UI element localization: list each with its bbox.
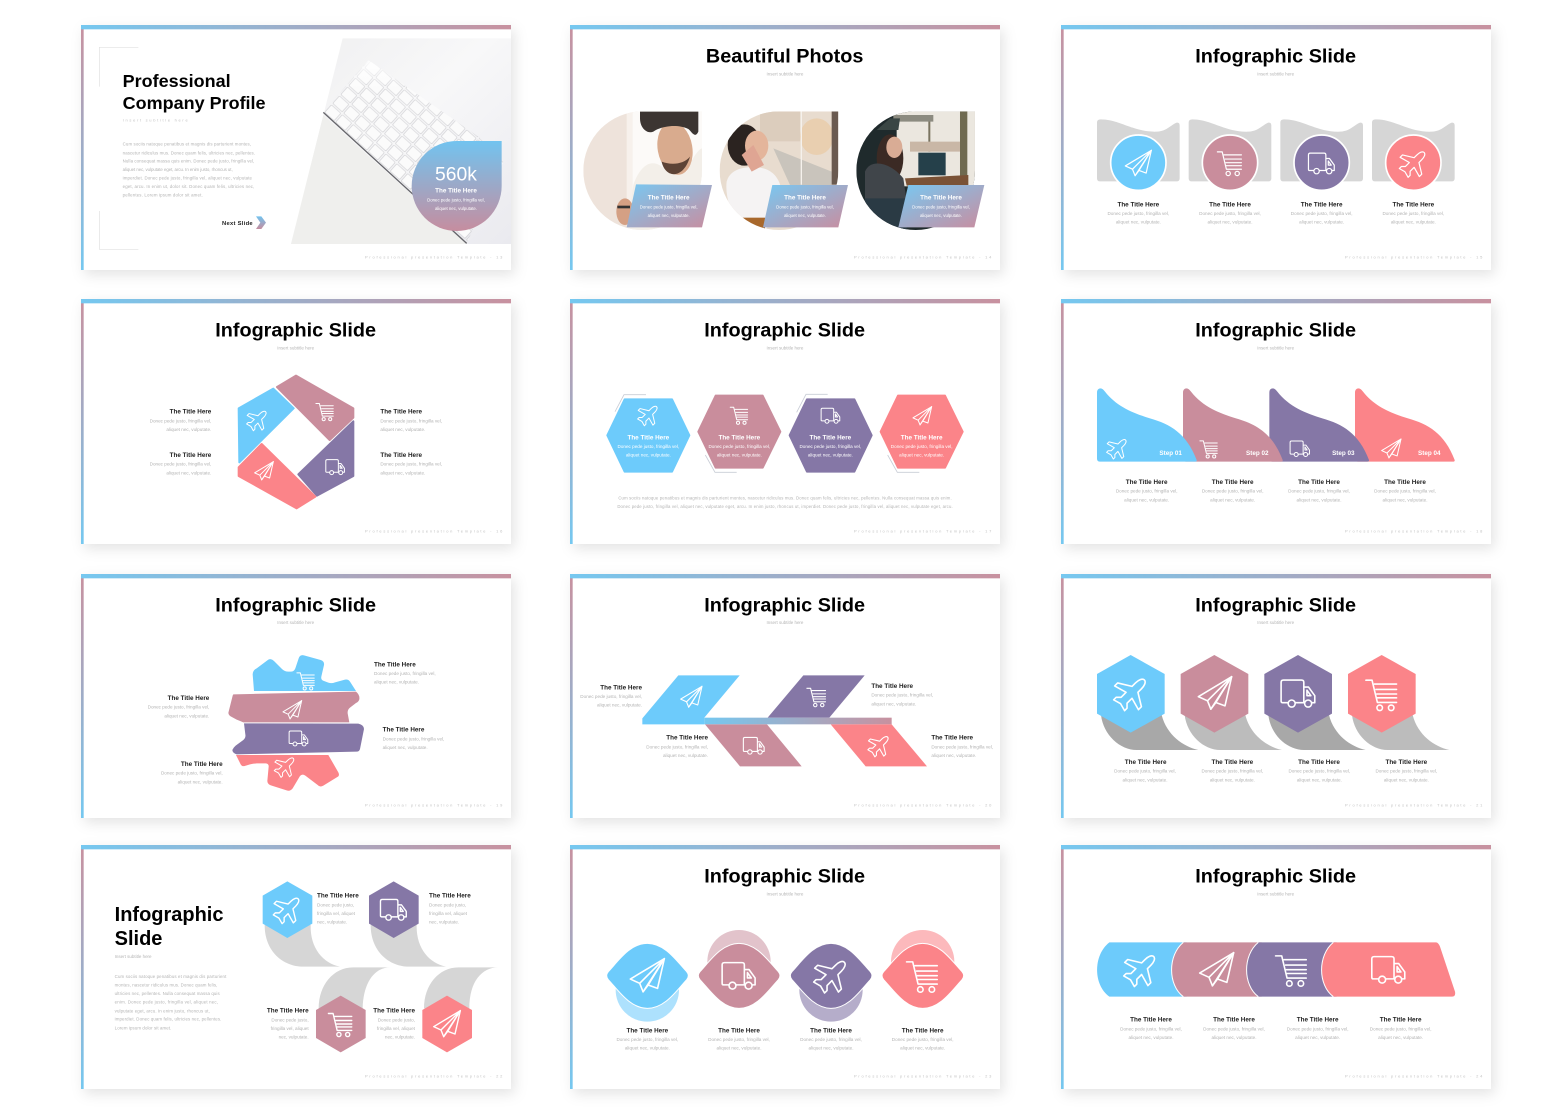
slide 5: four hexagons with paragraph: [570, 299, 1000, 544]
step 02 text: Donec pede justo, fringilla vel,: [1202, 489, 1264, 494]
step 04 text: aliquet nec, vulputate.: [1382, 497, 1427, 502]
card 2: [763, 185, 848, 227]
bottom paragraph: Cum sociis natoque penatibus et magnis dis parturient montes, nascetur ridiculus mus. Donec quam felis, ultricies nec, pellentes. Nulla consequat massa quis enim.: [618, 495, 952, 500]
parallelogram: purple cart: [768, 675, 865, 718]
label: bottom right: Donec pede justo, fringilla vel,: [380, 462, 442, 467]
hexagon 1: blue: aliquet nec, vulputate.: [626, 453, 671, 458]
subtitle: Insert subtitle here: [115, 954, 152, 959]
segment 3: purple cart: [1247, 942, 1337, 997]
card 2: The Title Here: [784, 194, 826, 201]
item 3: purple hexagon: aliquet nec, vulputate.: [1297, 777, 1342, 782]
body paragraph: imperdiet. Donec quam felis, ultricies nec, pellentes.: [115, 1017, 221, 1022]
card 1: Donec pede justo, fringilla vel,: [640, 204, 698, 209]
card 3: Donec pede justo, fringilla vel,: [912, 204, 970, 209]
title: Beautiful Photos: [706, 46, 863, 68]
callout: 560k bubble: 560k: [435, 165, 477, 186]
slide 7: gear: [81, 574, 511, 818]
step 01 sail: Step 01: [1159, 450, 1182, 457]
step 04 text: The Title Here: [1384, 479, 1426, 486]
heading: Slide: [115, 928, 162, 950]
item 2: cart: [1189, 119, 1271, 225]
item 3: purple hexagon: [1264, 655, 1366, 782]
segment: blue airplane: [239, 389, 294, 462]
step 04 sail: Step 04: [1418, 450, 1441, 457]
step 03 text: Donec pede justo, fringilla vel,: [1288, 489, 1350, 494]
body paragraph: enim. Donec pede justo, fringilla vel, aliquet nec,: [115, 1000, 218, 1005]
label 2: [1203, 1017, 1265, 1040]
item 1: blue hexagon: Donec pede justo, fringilla vel,: [1114, 769, 1176, 774]
label: blue: aliquet nec, vulputate.: [597, 703, 642, 708]
step 01 text: [1116, 479, 1178, 502]
label 1: Donec pede justo, fringilla vel,: [1120, 1026, 1182, 1031]
hexagon 4: coral: The Title Here: [901, 434, 943, 441]
title: Infographic Slide: [1195, 866, 1356, 888]
subtitle: Insert subtitle here: [767, 71, 804, 76]
label: bottom right: The Title Here: [380, 452, 423, 459]
card 2: aliquet nec, vulputate.: [784, 213, 826, 218]
label: bottom right: [373, 1008, 416, 1040]
label: purple: aliquet nec, vulputate.: [871, 701, 916, 706]
lens 1: blue plane: The Title Here: [626, 1027, 669, 1034]
segment 4: coral truck: [1322, 942, 1455, 997]
hexagon 2: rose: aliquet nec, vulputate.: [717, 453, 762, 458]
item 2: rose hexagon: The Title Here: [1211, 759, 1254, 766]
subtitle: Insert subtitle here: [1257, 345, 1295, 350]
item 2: cart: Donec pede justo, fringilla vel,: [1199, 211, 1261, 216]
label 4: [1370, 1017, 1432, 1040]
callout: 560k bubble: Donec pede justo, fringilla vel,: [427, 198, 485, 203]
label 1: The Title Here: [1130, 1017, 1172, 1024]
label: top left: fringilla vel, aliquet: [317, 911, 356, 916]
parallelogram: blue plane: [642, 675, 740, 724]
label: rose: The Title Here: [666, 735, 708, 742]
body paragraph: vulputate eget, arcu. In enim justo, rhoncus ut,: [115, 1008, 210, 1013]
label: bottom right: Donec pede justo,: [378, 1017, 415, 1022]
label: rose: [646, 735, 708, 758]
item 1: blue hexagon: aliquet nec, vulputate.: [1122, 777, 1167, 782]
hexagon: coral plane: [422, 996, 472, 1052]
heading: [123, 71, 266, 113]
label 4: aliquet nec, vulputate.: [1378, 1035, 1423, 1040]
step 01 text: The Title Here: [1126, 479, 1168, 486]
slide 12: segmented bar: [1061, 845, 1491, 1089]
heading: Professional: [123, 71, 231, 91]
label 2: Donec pede justo, fringilla vel,: [1203, 1026, 1265, 1031]
label 3: Donec pede justo, fringilla vel,: [1287, 1026, 1349, 1031]
slide 1: professional company profile: [81, 25, 511, 270]
label: lower right: aliquet nec, vulputate.: [383, 745, 428, 750]
item 3: truck: [1280, 119, 1363, 225]
item 4: coral hexagon: aliquet nec, vulputate.: [1384, 777, 1429, 782]
lens 4: coral cart: aliquet nec, vulputate.: [900, 1046, 945, 1051]
step 02 sail: Step 02: [1246, 450, 1269, 457]
label: top right: Donec pede justo, fringilla vel,: [374, 671, 436, 676]
label: bottom left: The Title Here: [267, 1008, 309, 1015]
lens 3: purple airplane: [790, 943, 872, 1051]
lens 2: rose truck: The Title Here: [718, 1027, 760, 1034]
label: top left: The Title Here: [170, 409, 212, 416]
body paragraph: nascetur ridiculus mus. Donec quam felis, ultricies nec, pellentes.: [123, 150, 255, 155]
slide 6: step sails: [1061, 299, 1491, 544]
label: coral: Donec pede justo, fringilla vel,: [931, 744, 993, 749]
label: top left: The Title Here: [317, 893, 359, 900]
label: bottom right: The Title Here: [373, 1008, 415, 1015]
next slide link: Next Slide: [222, 221, 253, 227]
item 2: rose hexagon: aliquet nec, vulputate.: [1210, 777, 1255, 782]
step 01 text: Donec pede justo, fringilla vel,: [1116, 489, 1178, 494]
step 04 text: [1374, 479, 1436, 502]
photo: woman at laptop: [856, 111, 975, 230]
lens 1: blue plane: Donec pede justo, fringilla vel,: [616, 1037, 678, 1042]
gear diagram: [228, 655, 364, 791]
card 1: [627, 184, 712, 227]
card 3: The Title Here: [920, 194, 962, 201]
gear slice: blue cart: [253, 655, 356, 691]
card 2: Donec pede justo, fringilla vel,: [776, 204, 834, 209]
label: top right: [429, 893, 471, 924]
label: bottom left: fringilla vel, aliquet: [271, 1026, 309, 1031]
slide 9: hexagons with tails: [1061, 574, 1491, 818]
label: lower right: [383, 727, 444, 750]
footer: Professional presentation Template - 19: [365, 803, 503, 808]
slide 10: left heading with connected hexagons: [81, 845, 511, 1089]
body paragraph: Lorem ipsum dolor sit amet.: [115, 1025, 171, 1030]
lens 4: coral cart: [882, 930, 964, 1051]
footer: Professional presentation Template - 14: [854, 255, 992, 260]
footer: Professional presentation Template - 21: [1345, 803, 1483, 808]
body paragraph: Cum sociis natoque penatibus et magnis dis parturient montes,: [123, 142, 251, 147]
label: top right: The Title Here: [374, 661, 416, 668]
hexagon: blue airplane: [263, 881, 312, 938]
label 2: The Title Here: [1213, 1017, 1255, 1024]
segment: coral plane: [239, 444, 315, 508]
hexagon 1: blue: Donec pede justo, fringilla vel,: [617, 444, 679, 449]
label: bottom right: aliquet nec, vulputate.: [380, 470, 425, 475]
slide 2: beautiful photos: [570, 25, 1000, 270]
footer: Professional presentation Template - 22: [365, 1074, 503, 1079]
label: top left: Donec pede justo,: [317, 903, 354, 908]
item 3: truck: Donec pede justo, fringilla vel,: [1291, 211, 1353, 216]
subtitle: Insert subtitle here: [1257, 620, 1295, 625]
hexagon: rose cart: [316, 996, 366, 1052]
label 1: [1120, 1017, 1182, 1040]
card 1: The Title Here: [648, 194, 690, 201]
keyboard photo: [291, 38, 511, 244]
slide 4: hexagon cycle: [81, 299, 511, 544]
label: top right: The Title Here: [429, 893, 471, 900]
label 4: The Title Here: [1380, 1017, 1422, 1024]
hexagon 2: rose: Donec pede justo, fringilla vel,: [708, 444, 770, 449]
title: Infographic Slide: [215, 594, 376, 616]
hexagon 3: purple: aliquet nec, vulputate.: [808, 453, 853, 458]
footer: Professional presentation Template - 16: [365, 529, 503, 534]
hexagon: purple truck: [369, 881, 419, 938]
title: Infographic Slide: [215, 320, 376, 342]
footer: Professional presentation Template - 24: [1345, 1074, 1483, 1079]
label: bottom right: fringilla vel, aliquet: [377, 1026, 416, 1031]
gear slice: coral airplane: [236, 751, 339, 791]
label: top right: Donec pede justo, fringilla vel,: [380, 418, 442, 423]
item 3: purple hexagon: The Title Here: [1298, 759, 1340, 766]
label: lower left: The Title Here: [181, 761, 223, 768]
item 1: plane: aliquet nec, vulputate.: [1116, 220, 1161, 225]
label: upper left: The Title Here: [168, 695, 210, 702]
step 02 sail: [1183, 388, 1283, 462]
item 1: blue hexagon: The Title Here: [1125, 759, 1167, 766]
label: upper left: aliquet nec, vulputate.: [164, 713, 209, 718]
label: coral: The Title Here: [931, 735, 974, 742]
segment 1: blue airplane: [1097, 942, 1187, 997]
label: top right: [380, 409, 442, 432]
body paragraph: ultricies nec, pellentes. Nulla consequat massa quis: [115, 991, 220, 996]
label: blue: [580, 684, 642, 708]
step 02 text: The Title Here: [1212, 479, 1254, 486]
step 01 text: aliquet nec, vulputate.: [1124, 497, 1169, 502]
step 02 text: aliquet nec, vulputate.: [1210, 497, 1255, 502]
item 4: coral hexagon: Donec pede justo, fringilla vel,: [1375, 769, 1437, 774]
item 1: plane: [1097, 119, 1180, 225]
body paragraph: Nulla consequat massa quis enim. Donec pede justo, fringilla vel,: [123, 159, 254, 164]
label: bottom left: Donec pede justo,: [271, 1017, 309, 1022]
segment: rose cart: [277, 376, 353, 440]
label: purple: The Title Here: [871, 683, 914, 690]
title: Infographic Slide: [704, 320, 865, 342]
item 1: plane: The Title Here: [1117, 201, 1160, 208]
subtitle: Insert subtitle here: [767, 620, 804, 625]
label: top right: fringilla vel, aliquet: [429, 911, 468, 916]
label: blue: The Title Here: [600, 684, 642, 691]
label: top left: [150, 409, 212, 432]
label: top right: aliquet nec, vulputate.: [374, 680, 419, 685]
label 1: aliquet nec, vulputate.: [1128, 1035, 1173, 1040]
hexagon 4: coral: Donec pede justo, fringilla vel,: [891, 444, 953, 449]
label: rose: Donec pede justo, fringilla vel,: [646, 744, 708, 749]
item 2: rose hexagon: Donec pede justo, fringilla vel,: [1201, 769, 1263, 774]
gear slice: purple truck: [232, 723, 364, 754]
label: purple: [871, 683, 933, 706]
footer: Professional presentation Template - 17: [854, 529, 992, 534]
item 3: truck: The Title Here: [1301, 201, 1343, 208]
hexagon 2: rose: [698, 396, 780, 472]
body paragraph: [123, 142, 255, 198]
callout: 560k bubble: aliquet nec, vulputate.: [435, 206, 477, 211]
label: lower left: aliquet nec, vulputate.: [178, 779, 223, 784]
lens 3: purple airplane: The Title Here: [810, 1027, 852, 1034]
connector tails: [265, 925, 498, 1008]
decorative corner brackets: [99, 47, 138, 249]
body paragraph: Cum sociis natoque penatibus et magnis dis parturient: [115, 974, 227, 979]
label: bottom left: [267, 1008, 309, 1040]
title: Infographic Slide: [1195, 46, 1356, 68]
label 3: The Title Here: [1297, 1017, 1339, 1024]
item 4: coral hexagon: [1348, 655, 1449, 782]
item 2: rose hexagon: [1181, 655, 1282, 782]
item 2: cart: aliquet nec, vulputate.: [1207, 220, 1252, 225]
label 3: aliquet nec, vulputate.: [1295, 1035, 1340, 1040]
body paragraph: imperdiet. Donec pede justo, fringilla vel, aliquet nec, vulputate: [123, 176, 253, 181]
slide 3: circles on grey flags: [1061, 25, 1491, 270]
footer: Professional presentation Template - 20: [854, 803, 992, 808]
photo: woman on phone: [720, 112, 838, 230]
next slide link: [222, 216, 266, 229]
subtitle: Insert subtitle here: [277, 345, 315, 350]
label: lower right: The Title Here: [383, 727, 425, 734]
card 1: aliquet nec, vulputate.: [648, 213, 690, 218]
bottom paragraph: [617, 495, 953, 509]
label: bottom right: [380, 452, 442, 475]
hexagon 1: blue: The Title Here: [627, 434, 670, 441]
step 03 sail: Step 03: [1332, 450, 1355, 457]
item 3: purple hexagon: Donec pede justo, fringilla vel,: [1288, 769, 1350, 774]
subtitle: Insert subtitle here: [277, 620, 315, 625]
item 4: airplane: Donec pede justo, fringilla vel,: [1382, 211, 1444, 216]
footer: Professional presentation Template - 13: [365, 255, 503, 260]
segment 2: rose plane: [1172, 942, 1262, 997]
item 1: plane: Donec pede justo, fringilla vel,: [1107, 211, 1169, 216]
label 2: aliquet nec, vulputate.: [1211, 1035, 1256, 1040]
label: rose: aliquet nec, vulputate.: [663, 753, 708, 758]
lens 1: blue plane: aliquet nec, vulputate.: [625, 1046, 670, 1051]
callout: 560k bubble: [412, 141, 502, 231]
label: lower right: Donec pede justo, fringilla vel,: [383, 736, 444, 741]
label: top left: Donec pede justo, fringilla vel,: [150, 418, 211, 423]
label 3: [1287, 1017, 1349, 1040]
callout: 560k bubble: The Title Here: [435, 188, 477, 195]
item 4: airplane: aliquet nec, vulputate.: [1391, 220, 1436, 225]
label: upper left: Donec pede justo, fringilla vel,: [148, 705, 209, 710]
item 4: airplane: [1372, 119, 1455, 225]
label 4: Donec pede justo, fringilla vel,: [1370, 1026, 1432, 1031]
step 03 sail: [1269, 388, 1369, 462]
heading: [115, 904, 223, 950]
subtitle: Insert subtitle here: [1257, 71, 1295, 76]
parallelogram: coral airplane: [831, 724, 927, 766]
slide 11: lens shapes: [570, 845, 1000, 1089]
label: lower left: Donec pede justo, fringilla vel,: [161, 771, 223, 776]
card 3: [898, 185, 984, 227]
hexagon 2: rose: The Title Here: [718, 434, 761, 441]
step 01 sail: [1097, 388, 1197, 463]
label: bottom left: aliquet nec, vulputate.: [166, 470, 211, 475]
lens 4: coral cart: Donec pede justo, fringilla vel,: [892, 1037, 954, 1042]
hexagon 4: coral: aliquet nec, vulputate.: [899, 453, 944, 458]
step 02 text: [1202, 479, 1264, 502]
body paragraph: aliquet nec, vulputate eget, arcu. In enim justo, rhoncus ut,: [123, 167, 233, 172]
label: lower left: [161, 761, 223, 784]
footer: Professional presentation Template - 23: [854, 1074, 992, 1079]
step 03 text: The Title Here: [1298, 479, 1340, 486]
body paragraph: pellentes. Lorem ipsum dolor sit amet.: [123, 193, 203, 198]
label: bottom left: nec, vulputate.: [279, 1035, 309, 1040]
card 3: aliquet nec, vulputate.: [920, 213, 962, 218]
hexagon 4: coral: [881, 396, 963, 472]
title: Infographic Slide: [704, 594, 865, 616]
hexagon 3: purple: The Title Here: [809, 434, 852, 441]
title: Infographic Slide: [1195, 594, 1356, 616]
label: top right: Donec pede justo,: [429, 903, 466, 908]
slide 8: parallelogram timeline: [570, 574, 1000, 818]
subtitle: Insert subtitle here: [767, 891, 804, 896]
step 04 text: Donec pede justo, fringilla vel,: [1374, 489, 1436, 494]
item 3: truck: aliquet nec, vulputate.: [1299, 220, 1344, 225]
lens 3: purple airplane: aliquet nec, vulputate.: [808, 1046, 853, 1051]
label: blue: Donec pede justo, fringilla vel,: [580, 694, 642, 699]
bottom paragraph: Donec pede justo, fringilla vel, aliquet nec, vulputate eget, arcu. In enim justo, rhoncus ut, imperdiet. Donec pede justo, fringilla vel, aliquet nec, vulputate eget, arcu.: [617, 504, 953, 509]
label: purple: Donec pede justo, fringilla vel,: [871, 693, 933, 698]
gear slice: rose plane: [228, 692, 359, 722]
label: top right: nec, vulputate.: [429, 919, 459, 924]
segment: purple truck: [298, 421, 353, 496]
label: top right: aliquet nec, vulputate.: [380, 427, 425, 432]
label: coral: aliquet nec, vulputate.: [931, 753, 976, 758]
item 1: blue hexagon: [1097, 655, 1198, 782]
lens 2: rose truck: aliquet nec, vulputate.: [716, 1046, 761, 1051]
label: bottom right: nec, vulputate.: [385, 1035, 415, 1040]
footer: Professional presentation Template - 15: [1345, 255, 1483, 260]
subtitle: Insert subtitle here: [767, 345, 804, 350]
label: top left: [317, 893, 359, 924]
body paragraph: [115, 974, 227, 1030]
parallelogram: rose truck: [705, 724, 802, 766]
label: coral: [931, 735, 993, 758]
label: bottom left: The Title Here: [170, 452, 212, 459]
lens 1: blue plane: [607, 943, 688, 1051]
heading: Company Profile: [123, 93, 266, 113]
step 03 text: aliquet nec, vulputate.: [1296, 497, 1341, 502]
lens 3: purple airplane: Donec pede justo, fringilla vel,: [800, 1037, 862, 1042]
label: top left: aliquet nec, vulputate.: [166, 427, 211, 432]
photo: man with phone: [584, 112, 702, 230]
label: bottom left: [150, 452, 212, 475]
hexagon 3: purple: Donec pede justo, fringilla vel,: [799, 444, 861, 449]
lens 4: coral cart: The Title Here: [902, 1027, 944, 1034]
label: bottom left: Donec pede justo, fringilla vel,: [150, 462, 211, 467]
lens 2: rose truck: Donec pede justo, fringilla vel,: [708, 1037, 770, 1042]
subtitle: Insert subtitle here: [1257, 891, 1295, 896]
hexagon diagram: [239, 376, 353, 508]
item 4: airplane: The Title Here: [1392, 201, 1435, 208]
lens 2: rose truck: [698, 930, 780, 1051]
label: top left: nec, vulputate.: [317, 919, 347, 924]
subtitle: Insert subtitle here: [123, 117, 188, 122]
footer: Professional presentation Template - 18: [1345, 529, 1483, 534]
body paragraph: montes, nascetur ridiculus mus. Donec quam felis,: [115, 983, 217, 988]
body paragraph: eget, arcu. In enim ut, dolor sit. Donec quam felis, ultricies nec,: [123, 184, 254, 189]
heading: Infographic: [115, 904, 223, 926]
item 4: coral hexagon: The Title Here: [1385, 759, 1428, 766]
label: top right: The Title Here: [380, 409, 423, 416]
label: upper left: [148, 695, 210, 718]
step 04 sail: [1355, 388, 1455, 462]
label: top right: [374, 661, 436, 685]
title: Infographic Slide: [704, 866, 865, 888]
step 03 text: [1288, 479, 1350, 502]
hexagon 1: blue: [607, 395, 689, 472]
title: Infographic Slide: [1195, 320, 1356, 342]
timeline bar: [704, 718, 892, 724]
hexagon 3: purple: [790, 394, 872, 472]
item 2: cart: The Title Here: [1209, 201, 1251, 208]
